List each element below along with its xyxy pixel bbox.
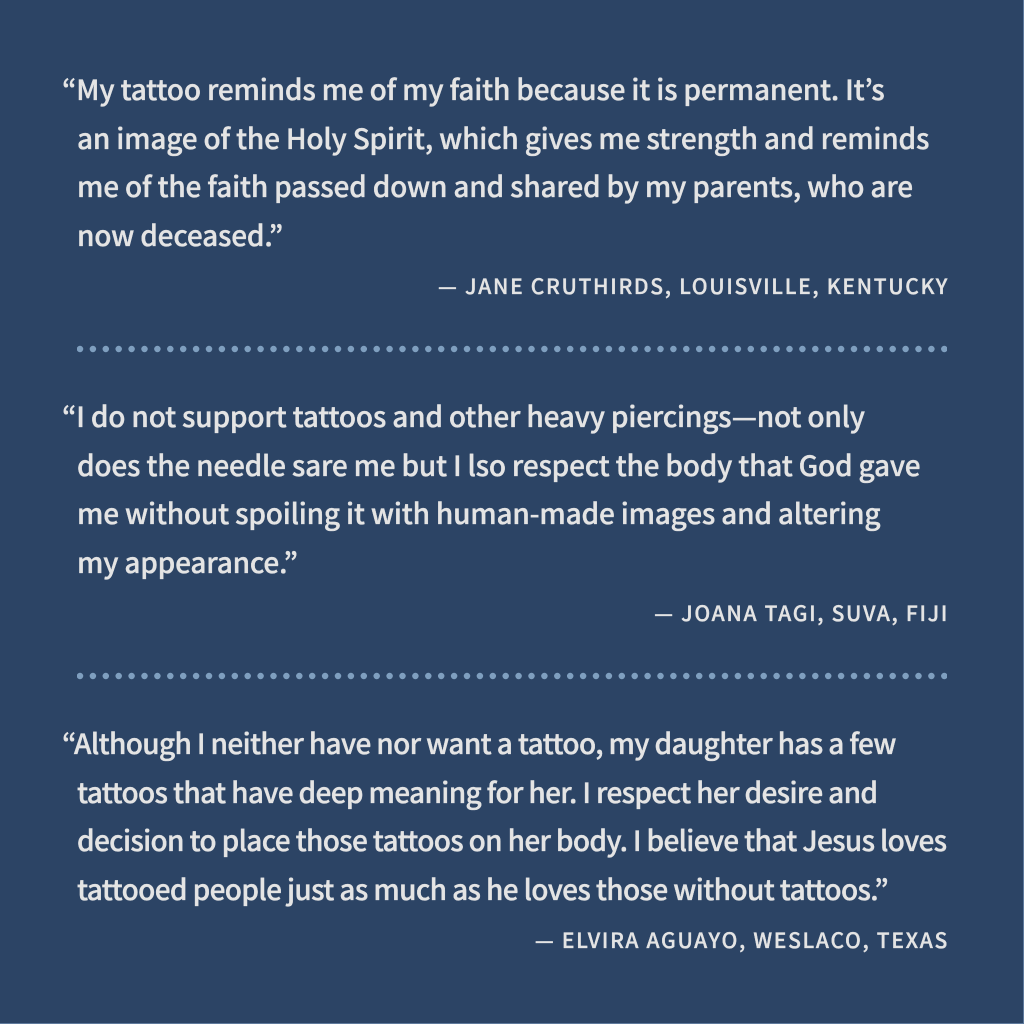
quote 1 text block: an image of the Holy Spirit, which gives me strength and reminds	[77, 118, 929, 158]
quote 1 text block: me of the faith passed down and shared by my parents, who are	[77, 166, 913, 206]
divider 1	[77, 346, 947, 352]
quote 3 text block	[62, 723, 946, 909]
quote 2 text block: my appearance.”	[77, 542, 298, 582]
quote 3 text block: tattoos that have deep meaning for her. I respect her desire and	[77, 772, 877, 812]
quote 1 text block: “My tattoo reminds me of my faith because it is permanent. It’s	[62, 69, 884, 109]
quote 1 text block	[62, 69, 929, 255]
attribution 2: — JOANA TAGI, SUVA, FIJI	[654, 598, 949, 628]
quote 2 text block: “I do not support tattoos and other heavy piercings—not only	[62, 396, 865, 436]
quote 3 text block: tattooed people just as much as he loves those without tattoos.”	[77, 869, 888, 909]
quote 2 text block: me without spoiling it with human-made images and altering	[77, 493, 880, 533]
quote 1 text block: now deceased.”	[77, 215, 283, 255]
attribution 1: — JANE CRUTHIRDS, LOUISVILLE, KENTUCKY	[438, 271, 949, 301]
quote 3 text block: “Although I neither have nor want a tattoo, my daughter has a few	[62, 723, 896, 763]
divider 2	[77, 672, 947, 680]
quote 2 text block	[62, 396, 920, 582]
quote 2 text block: does the needle sare me but I lso respect the body that God gave	[77, 445, 920, 485]
quote 3 text block: decision to place those tattoos on her body. I believe that Jesus loves	[77, 820, 946, 860]
attribution 3: — ELVIRA AGUAYO, WESLACO, TEXAS	[535, 925, 949, 955]
